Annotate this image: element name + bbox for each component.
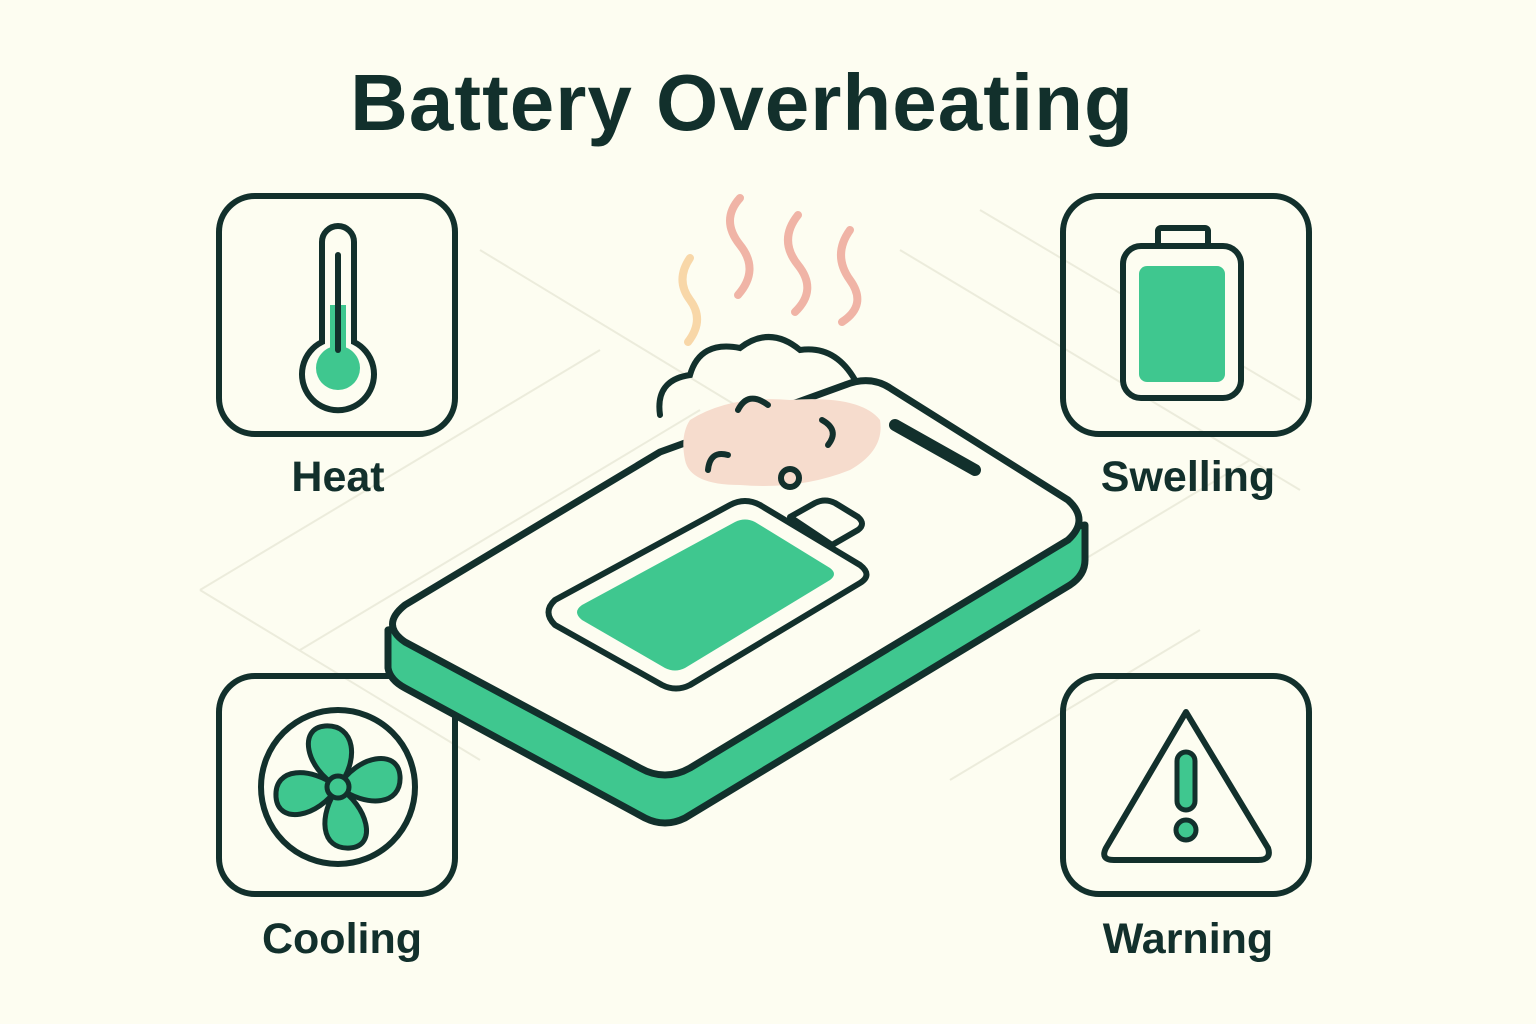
- icon: battery: [1123, 228, 1241, 398]
- panel: cooling: [219, 676, 455, 963]
- title: Battery Overheating: [350, 58, 1134, 147]
- icon: warning triangle: [1104, 712, 1269, 860]
- panel: heat: Heat: [291, 453, 385, 501]
- battery on screen: [548, 500, 866, 688]
- panel: cooling: Cooling: [262, 915, 422, 963]
- phone: [388, 381, 1085, 823]
- icon: fan: [261, 710, 415, 864]
- heat waves: [682, 198, 857, 342]
- icon: thermometer: [302, 226, 374, 410]
- smoke cloud: [659, 337, 881, 487]
- panel: warning: [1063, 676, 1309, 963]
- panel: swelling: Swelling: [1101, 453, 1275, 501]
- panel: warning: Warning: [1103, 915, 1273, 963]
- panel: heat: [219, 196, 455, 501]
- panel: swelling: [1063, 196, 1309, 501]
